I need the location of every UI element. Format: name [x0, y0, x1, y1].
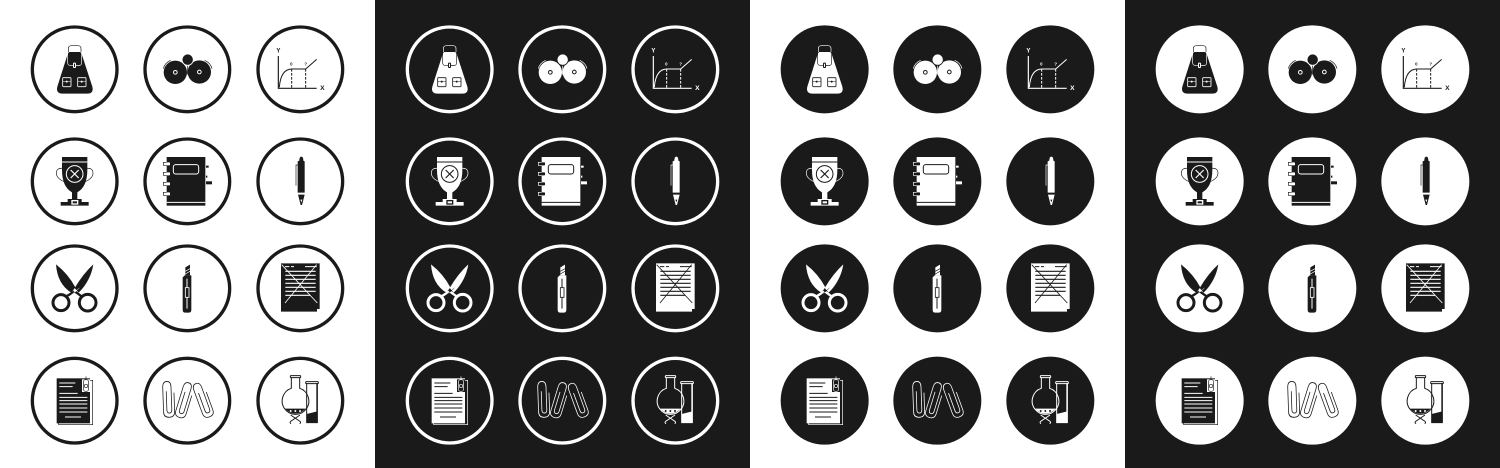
icon: chart: X: [695, 85, 700, 92]
icon: trophy: [32, 139, 117, 224]
icon: pen: [633, 139, 718, 224]
icon: crossed document: [1006, 244, 1094, 332]
icon: chart: 0: [1040, 61, 1043, 66]
icon: rollers: [1268, 25, 1356, 113]
icon: paper clips: [1268, 357, 1356, 445]
icon: chart: 0: [290, 61, 293, 66]
icon: paper clips: [893, 357, 981, 445]
icon: chart: ?: [304, 61, 307, 66]
icon: chart: ?: [1054, 61, 1057, 66]
icon: bag: [32, 27, 117, 112]
icon: pen: [258, 139, 343, 224]
icon: attached document: [781, 357, 869, 445]
panel: white background with dark discs: [750, 0, 1125, 468]
icon: chart: 0: [665, 61, 668, 66]
icon: attached document: [407, 358, 492, 443]
icon: chart: 0: [1415, 61, 1418, 66]
icon: flasks: [1381, 357, 1469, 445]
icon: chart: ?: [679, 61, 682, 66]
icon: flasks: [258, 358, 343, 443]
icon: notebook: [893, 137, 981, 225]
icon: chart: X: [320, 85, 325, 92]
icon: chart: Y: [1026, 49, 1030, 55]
icon: chart: Y: [1401, 49, 1405, 55]
icon: chart: [1006, 25, 1094, 113]
icon: bag: [407, 27, 492, 112]
icon: cutter: [520, 246, 605, 331]
icon: chart: X: [1445, 85, 1450, 92]
icon: trophy: [781, 137, 869, 225]
icon: notebook: [520, 139, 605, 224]
icon: attached document: [1156, 357, 1244, 445]
icon: pen: [1381, 137, 1469, 225]
icon: chart: [1381, 25, 1469, 113]
icon: chart: [633, 27, 718, 112]
icon: notebook: [1268, 137, 1356, 225]
icon: scissors: [407, 246, 492, 331]
icon: rollers: [145, 27, 230, 112]
icon: cutter: [1268, 244, 1356, 332]
icon: scissors: [781, 244, 869, 332]
icon: scissors: [1156, 244, 1244, 332]
panel: dark background with white discs: [1125, 0, 1500, 468]
icon: notebook: [145, 139, 230, 224]
icon: paper clips: [520, 358, 605, 443]
icon: crossed document: [1381, 244, 1469, 332]
icon: trophy: [1156, 137, 1244, 225]
icon: rollers: [893, 25, 981, 113]
icon: cutter: [893, 244, 981, 332]
icon: scissors: [32, 246, 117, 331]
icon: chart: Y: [651, 49, 655, 55]
icon: chart: X: [1070, 85, 1075, 92]
icon: chart: Y: [276, 49, 280, 55]
icon: cutter: [145, 246, 230, 331]
icon: bag: [781, 25, 869, 113]
icon: pen: [1006, 137, 1094, 225]
icon: flasks: [1006, 357, 1094, 445]
icon: trophy: [407, 139, 492, 224]
icon: crossed document: [633, 246, 718, 331]
icon: attached document: [32, 358, 117, 443]
icon: flasks: [633, 358, 718, 443]
icon: paper clips: [145, 358, 230, 443]
panel: white background with outlined rings: [0, 0, 375, 468]
icon: rollers: [520, 27, 605, 112]
icon: bag: [1156, 25, 1244, 113]
icon: chart: ?: [1429, 61, 1432, 66]
icon: chart: [258, 27, 343, 112]
icon: crossed document: [258, 246, 343, 331]
panel: dark background with outlined rings: [375, 0, 750, 468]
